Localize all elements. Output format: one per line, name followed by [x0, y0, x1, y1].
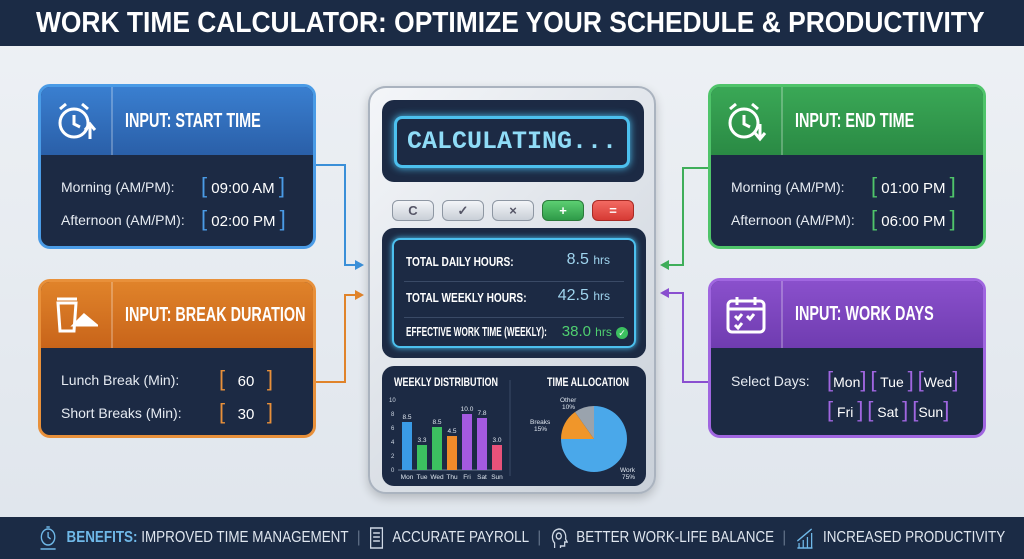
panel: start time [38, 84, 316, 249]
title bar [0, 0, 1024, 46]
panel: end time [708, 84, 986, 249]
charts panel: 3.0 [492, 437, 502, 444]
charts panel: 0 [391, 468, 395, 474]
panel: break duration: [ 30 ] [219, 399, 273, 424]
panel: start time: [ 02:00 PM ] [201, 206, 286, 231]
charts panel: Sat [477, 474, 487, 481]
charts panel: 10% [562, 404, 575, 411]
panel: break duration [38, 279, 316, 438]
charts panel: Wed [430, 474, 444, 481]
charts panel: 4 [391, 440, 395, 446]
buttons [392, 200, 434, 221]
charts panel: 7.8 [477, 410, 487, 417]
footer: benefits bar: ACCURATE PAYROLL [392, 529, 529, 546]
charts panel: Tue [417, 474, 428, 481]
charts panel: 8 [391, 412, 395, 418]
results panel: TOTAL WEEKLY HOURS: [406, 290, 527, 305]
charts panel: WEEKLY DISTRIBUTION [394, 375, 498, 389]
panel: end time: Morning (AM/PM): [731, 179, 845, 195]
panel: end time: [ 06:00 PM ] [871, 206, 956, 231]
display: CALCULATING... [407, 127, 617, 156]
charts panel: Mon [401, 474, 414, 481]
charts panel: Breaks [530, 419, 551, 426]
footer: benefits bar [0, 517, 1024, 559]
charts panel: 6 [391, 426, 395, 432]
footer: benefits bar: | [783, 529, 786, 546]
charts panel: Other [560, 397, 577, 404]
footer: benefits bar: | [357, 529, 360, 546]
calculator: + [559, 203, 567, 218]
charts panel: Fri [463, 474, 471, 481]
icon: growth chart [797, 528, 812, 549]
header: work days: INPUT: WORK DAYS [795, 303, 934, 325]
header: start time [41, 87, 313, 155]
panel: work days: Select Days: [731, 373, 810, 389]
charts panel: 8.5 [432, 419, 442, 426]
charts panel: 10.0 [461, 406, 474, 413]
charts panel: 2 [391, 454, 395, 460]
charts panel: Thu [446, 474, 458, 481]
icon: head [552, 528, 568, 548]
header: end time [711, 87, 983, 155]
footer: benefits bar: BETTER WORK-LIFE BALANCE [576, 529, 774, 546]
header: work days [711, 281, 983, 348]
charts panel: 10 [389, 398, 396, 404]
icon: document [370, 527, 384, 549]
charts panel: 15% [534, 426, 547, 433]
results panel [382, 228, 646, 358]
calculator: = [609, 203, 617, 218]
buttons: C [408, 203, 418, 218]
results panel: 8.5 hrs [567, 251, 610, 268]
results panel: 38.0 hrs [562, 323, 612, 340]
charts panel: 8.5 [402, 414, 412, 421]
header: break duration [41, 282, 313, 348]
charts panel: Sun [491, 474, 503, 481]
results panel: 42.5 hrs [558, 287, 610, 304]
panel: end time: [ 01:00 PM ] [871, 173, 956, 198]
panel: break duration: Lunch Break (Min): [61, 372, 179, 388]
title bar: WORK TIME CALCULATOR: OPTIMIZE YOUR SCHEDULE & PRODUCTIVITY [36, 7, 985, 39]
footer: benefits bar: | [537, 529, 541, 546]
charts panel: 4.5 [447, 428, 457, 435]
panel: work days [708, 278, 986, 438]
panel: end time: Afternoon (AM/PM): [731, 212, 855, 228]
panel: start time: Afternoon (AM/PM): [61, 212, 185, 228]
header: end time: INPUT: END TIME [795, 110, 914, 132]
calculator [368, 86, 656, 494]
footer: benefits bar: INCREASED PRODUCTIVITY [823, 529, 1005, 546]
display [382, 100, 644, 182]
results panel: ✓ [618, 328, 626, 338]
panel: start time: [ 09:00 AM ] [201, 173, 285, 198]
calculator: × [509, 203, 517, 218]
charts panel [382, 366, 646, 486]
icon: stopwatch [40, 526, 56, 550]
footer: benefits bar: BENEFITS: IMPROVED TIME MANAGEMENT [67, 529, 349, 546]
panel: work days: [ Fri ] [ Sat ] [Sun] [827, 397, 949, 422]
panel: break duration: Short Breaks (Min): [61, 405, 182, 421]
panel: break duration: [ 60 ] [219, 366, 273, 391]
panel: start time: Morning (AM/PM): [61, 179, 175, 195]
charts panel: 75% [622, 474, 635, 481]
header: start time: INPUT: START TIME [125, 110, 261, 132]
header: break duration: INPUT: BREAK DURATION [125, 304, 306, 326]
charts panel: 3.3 [417, 437, 427, 444]
results panel: EFFECTIVE WORK TIME (WEEKLY): [406, 325, 547, 339]
charts panel: Work [620, 467, 636, 474]
results panel: TOTAL DAILY HOURS: [406, 254, 514, 269]
panel: work days: [Mon] [ Tue ] [Wed] [827, 367, 958, 392]
calculator: ✓ [458, 203, 468, 218]
